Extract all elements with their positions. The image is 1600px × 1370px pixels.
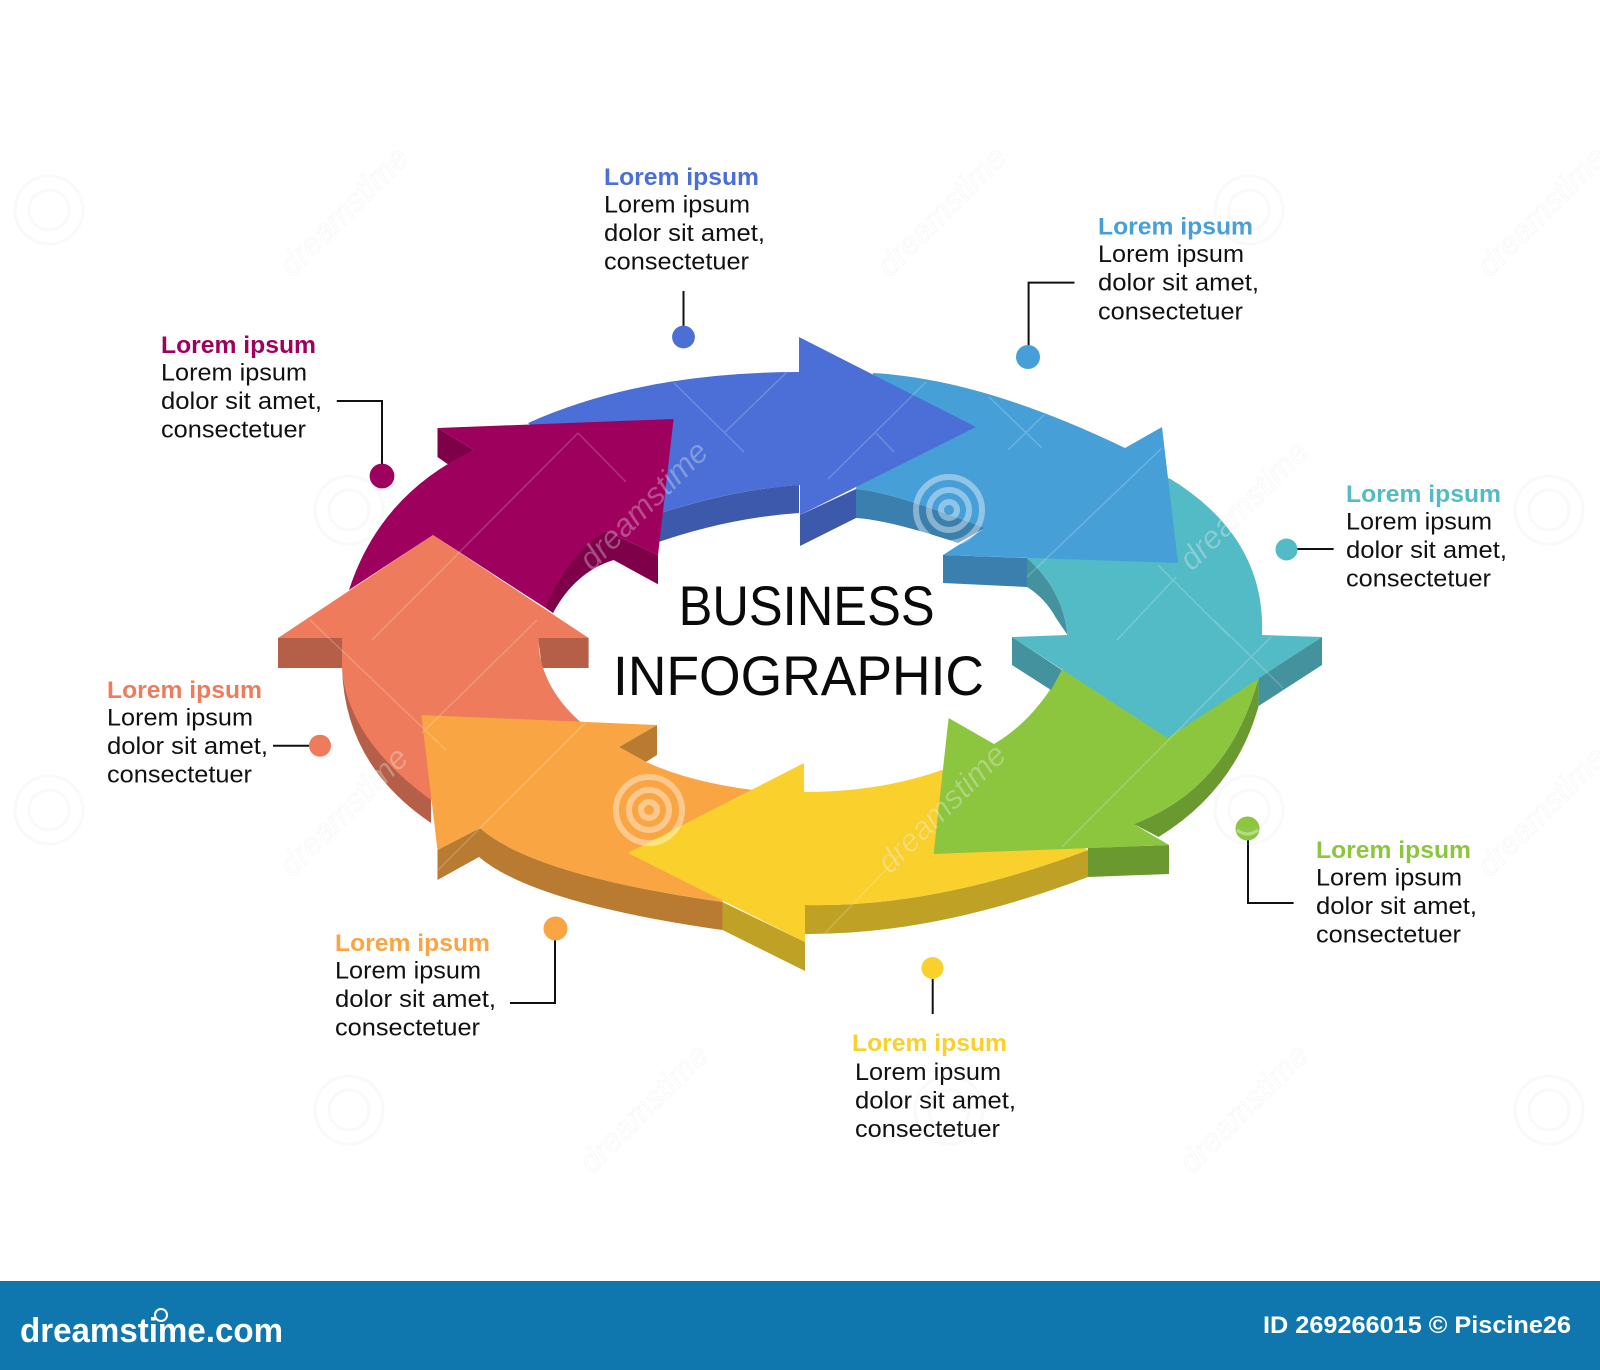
arrow: teal (1012, 478, 1322, 738)
callout: yellow (852, 957, 1016, 1143)
callout: maroon (161, 332, 394, 488)
callout: maroon: Lorem ipsum (161, 332, 316, 359)
watermark: stock photo overlay (15, 139, 1600, 1180)
title: INFOGRAPHIC (613, 644, 984, 707)
watermark: stock photo overlay: dreamstime (869, 736, 1013, 880)
callout: orange: dolor sit amet, (335, 986, 496, 1013)
callout: orange: Lorem ipsum (335, 958, 481, 984)
arrow: maroon (349, 419, 674, 613)
title: BUSINESS (679, 574, 935, 637)
callout: green: dolor sit amet, (1316, 893, 1477, 920)
callout: salmon: Lorem ipsum (107, 677, 262, 704)
callout: teal: Lorem ipsum (1346, 508, 1492, 536)
callout: light blue: Lorem ipsum (1098, 241, 1244, 268)
callout: yellow: Lorem ipsum (855, 1059, 1001, 1086)
callout: maroon: dolor sit amet, (161, 388, 322, 415)
callout: salmon (107, 677, 331, 789)
callout: green: Lorem ipsum (1316, 864, 1462, 892)
arrow: light blue (856, 373, 1178, 587)
callout: teal: dolor sit amet, (1346, 537, 1507, 564)
callout: teal (1276, 481, 1507, 593)
callout: blue: consectetuer (604, 249, 749, 276)
watermark: stock photo overlay: dreamstime (1171, 1036, 1315, 1180)
callout: green: Lorem ipsum (1316, 837, 1471, 864)
cycle diagram: eight 3D arrows (278, 337, 1322, 971)
footer band (0, 1281, 1600, 1370)
watermark: stock photo overlay: dreamstime (571, 433, 715, 577)
callout: salmon: dolor sit amet, (107, 733, 268, 760)
callout: green (1236, 816, 1477, 949)
callout: maroon: Lorem ipsum (161, 360, 307, 386)
arrow: blue (528, 337, 976, 546)
watermark: stock photo overlay: dreamstime (571, 1036, 715, 1180)
footer credit: ID 269266015 © Piscine26 (1263, 1312, 1571, 1339)
callout: teal: Lorem ipsum (1346, 481, 1501, 508)
arrow: green (934, 670, 1259, 877)
callout: yellow: dolor sit amet, (855, 1088, 1016, 1114)
callout: orange: consectetuer (335, 1015, 480, 1042)
title (613, 574, 984, 707)
watermark: stock photo overlay: dreamstime (271, 739, 415, 883)
callout: orange: Lorem ipsum (335, 930, 490, 957)
callout: light blue (1016, 214, 1259, 369)
arrow: orange (421, 715, 753, 930)
callout: yellow: consectetuer (855, 1116, 1000, 1143)
watermark: stock photo overlay: dreamstime (1171, 433, 1315, 577)
arrow: yellow (628, 763, 1088, 971)
callout: teal: consectetuer (1346, 566, 1491, 593)
callout: orange (335, 916, 568, 1042)
callout: green: consectetuer (1316, 922, 1461, 949)
callout: blue: dolor sit amet, (604, 220, 765, 247)
callout: blue: Lorem ipsum (604, 164, 759, 191)
callout: yellow: Lorem ipsum (852, 1030, 1007, 1057)
callout: maroon: consectetuer (161, 417, 306, 444)
callout: light blue: dolor sit amet, (1098, 270, 1259, 297)
callout: salmon: consectetuer (107, 762, 252, 789)
callout: blue (604, 164, 765, 348)
callout: salmon: Lorem ipsum (107, 704, 253, 732)
watermark: stock photo overlay: dreamstime (271, 139, 415, 283)
callout: blue: Lorem ipsum (604, 192, 750, 218)
callout: light blue: Lorem ipsum (1098, 214, 1253, 241)
callout: light blue: consectetuer (1098, 298, 1243, 325)
watermark: stock photo overlay: dreamstime (869, 139, 1013, 283)
footer logo: dreamstime.com (20, 1312, 283, 1350)
arrow: salmon (278, 535, 590, 823)
